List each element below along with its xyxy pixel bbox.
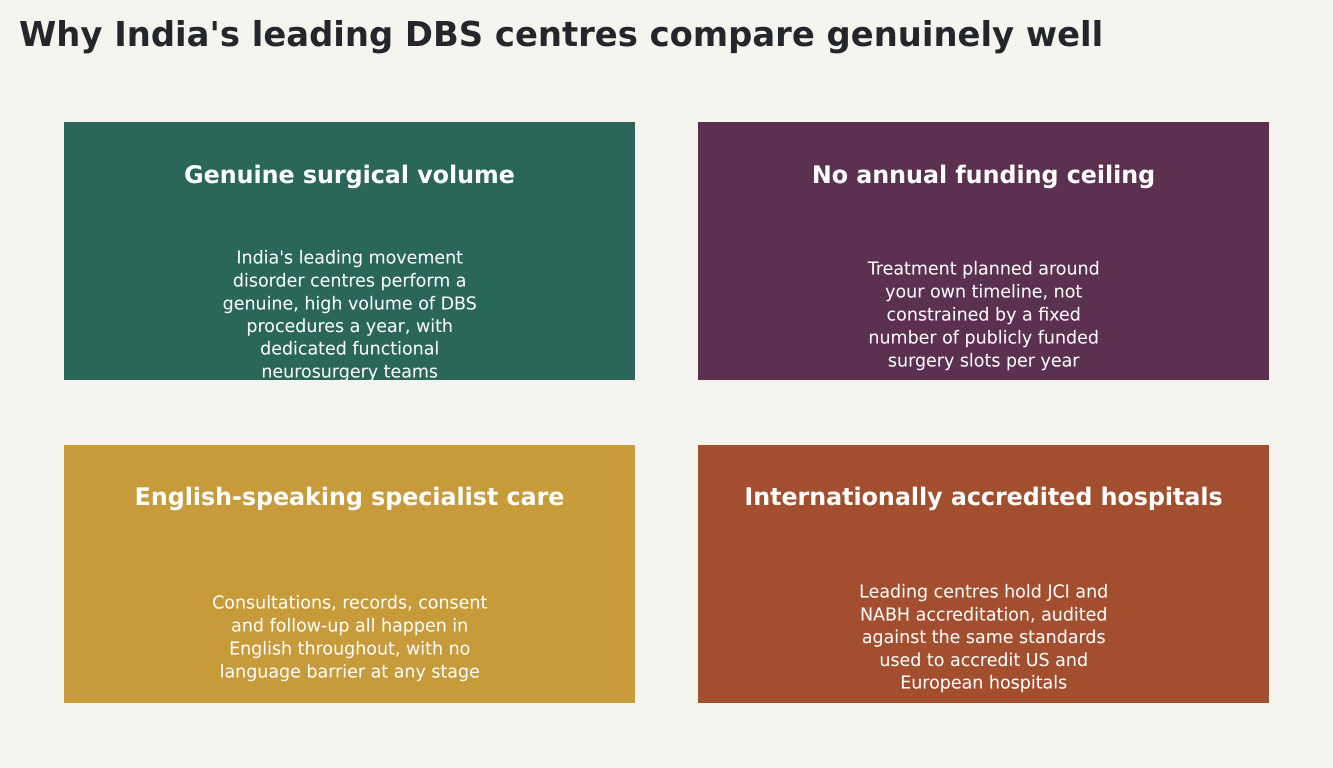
text block: genuine surgical volume: genuine, high volume of DBS bbox=[223, 294, 477, 314]
text block: internationally accredited hospitals: European hospitals bbox=[900, 673, 1067, 694]
text block: no annual funding ceiling: number of publicly funded bbox=[868, 328, 1099, 348]
text block: english-speaking specialist care: language barrier at any stage bbox=[220, 662, 480, 682]
text block: internationally accredited hospitals bbox=[859, 581, 1108, 694]
text block: english-speaking specialist care bbox=[212, 593, 487, 682]
text block: internationally accredited hospitals: Leading centres hold JCI and bbox=[859, 581, 1108, 602]
text block: genuine surgical volume: disorder centres perform a bbox=[233, 270, 466, 291]
text block: internationally accredited hospitals: used to accredit US and bbox=[879, 650, 1088, 671]
text block: english-speaking specialist care: and follow-up all happen in bbox=[231, 615, 468, 636]
text block: no annual funding ceiling: your own timeline, not bbox=[885, 281, 1082, 302]
text block: english-speaking specialist care: Consultations, records, consent bbox=[212, 593, 487, 614]
panel: genuine surgical volume bbox=[64, 122, 635, 382]
heading: genuine surgical volume: Genuine surgical volume bbox=[184, 161, 515, 189]
text block: internationally accredited hospitals: NABH accreditation, audited bbox=[860, 604, 1107, 626]
text block: genuine surgical volume: procedures a year, with bbox=[246, 316, 453, 337]
text block: english-speaking specialist care: English throughout, with no bbox=[229, 639, 470, 660]
text block: genuine surgical volume: India's leading movement bbox=[236, 248, 463, 268]
panel: no annual funding ceiling bbox=[698, 122, 1269, 380]
text block: genuine surgical volume: dedicated functional bbox=[260, 339, 439, 360]
text block: no annual funding ceiling: Treatment planned around bbox=[867, 259, 1100, 280]
title: Why India's leading DBS centres compare genuinely well bbox=[19, 15, 1103, 55]
text block: no annual funding ceiling: constrained by a fixed bbox=[887, 305, 1081, 326]
text block: no annual funding ceiling: surgery slots per year bbox=[888, 350, 1080, 372]
panel: internationally accredited hospitals bbox=[698, 445, 1269, 703]
text block: genuine surgical volume bbox=[223, 248, 477, 382]
heading: english-speaking specialist care: English-speaking specialist care bbox=[135, 483, 564, 511]
text block: genuine surgical volume: neurosurgery teams bbox=[261, 362, 438, 382]
text block: internationally accredited hospitals: against the same standards bbox=[862, 627, 1106, 648]
panel: english-speaking specialist care bbox=[64, 445, 635, 703]
heading: internationally accredited hospitals: Internationally accredited hospitals bbox=[744, 483, 1223, 511]
text block: no annual funding ceiling bbox=[867, 259, 1100, 372]
heading: no annual funding ceiling: No annual funding ceiling bbox=[812, 161, 1155, 189]
